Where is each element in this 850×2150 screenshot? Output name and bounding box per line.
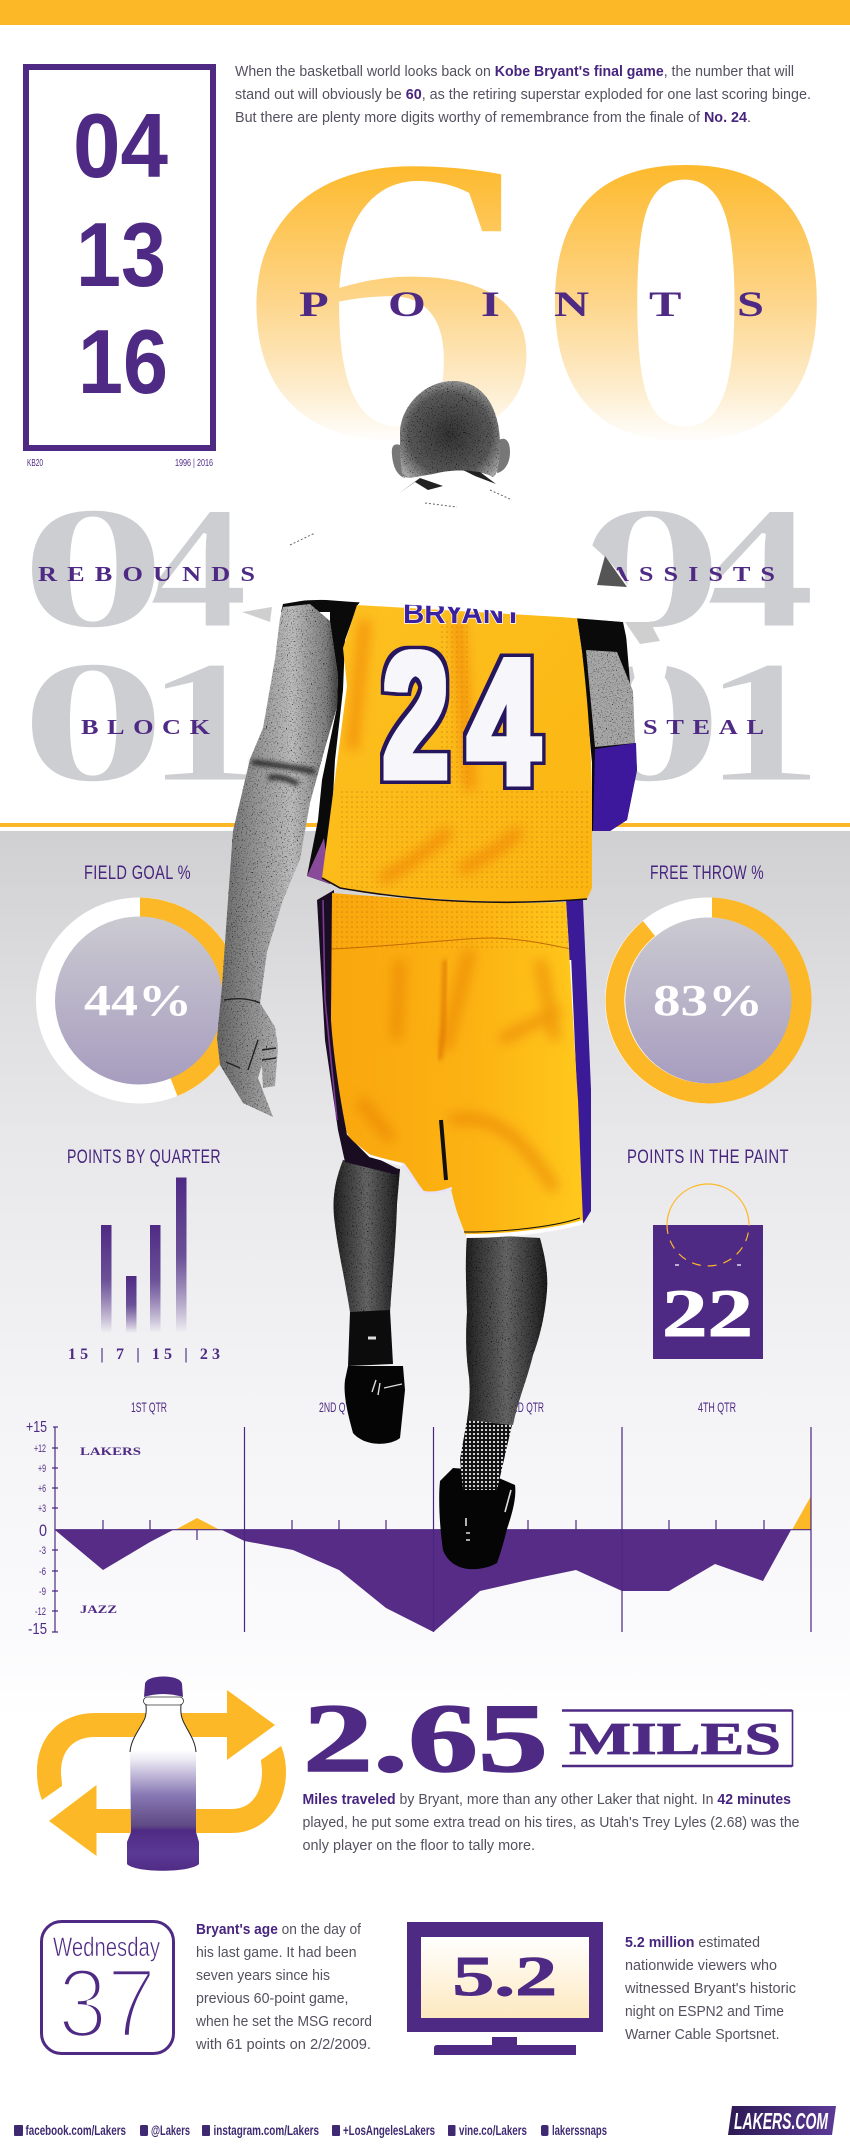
- viewers paragraph: Warner Cable Sportsnet.: [625, 2026, 780, 2043]
- age paragraph: seven years since his: [196, 1967, 330, 1984]
- team labels: LAKERS: [80, 1444, 141, 1458]
- age paragraph: [195, 1921, 372, 2053]
- jersey: [322, 597, 592, 902]
- calendar icon: age 37: [42, 1922, 174, 2058]
- left arm and hand: [217, 604, 338, 1117]
- big 60 numeral: 0: [526, 68, 846, 531]
- plus/minus chart: [26, 1399, 811, 1638]
- date numbers: 16: [78, 312, 168, 413]
- donut: free throw 83%: 83%: [653, 976, 763, 1025]
- social handles: [26, 2123, 607, 2138]
- lakers deficit area: [55, 1530, 791, 1632]
- television icon: 5.2 million: 5.2: [452, 1946, 557, 2008]
- viewers paragraph: nationwide viewers who: [625, 1957, 777, 1974]
- stat: 04 assists: ASSISTS: [610, 563, 775, 586]
- viewers paragraph: night on ESPN2 and Time: [625, 2003, 784, 2020]
- social footer: [14, 2123, 607, 2138]
- axis labels: +15: [26, 1419, 47, 1436]
- date panel captions: 1996 | 2016: [175, 457, 213, 469]
- MILES box: MILES: [569, 1713, 781, 1764]
- jersey name: BRYANT: [403, 597, 522, 630]
- points by quarter heading: POINTS BY QUARTER: [67, 1147, 221, 1168]
- date numbers: 04: [73, 96, 168, 197]
- jersey number: [383, 615, 539, 821]
- axis labels: -15: [28, 1621, 47, 1638]
- shorts side stripes: [317, 890, 591, 1224]
- POINTS label: POINTS: [299, 285, 764, 324]
- stat: 04 assists: [575, 470, 817, 666]
- social handles: instagram.com/Lakers: [214, 2123, 319, 2138]
- team labels: [80, 1444, 141, 1616]
- stat: 01 steal: 1: [701, 623, 825, 820]
- wrist and hand lines: [224, 999, 276, 1070]
- MILES box: [562, 1710, 792, 1766]
- stat: 01 block: 0: [18, 624, 168, 820]
- intro text: When the basketball world looks back on Kobe Bryant's final game, the number that will: [235, 63, 794, 80]
- social handles: facebook.com/Lakers: [26, 2123, 126, 2138]
- quarter labels: 1ST QTR: [131, 1399, 167, 1415]
- stat: 04 assists: 0: [575, 470, 725, 666]
- social handles: @Lakers: [151, 2123, 190, 2138]
- big 60 numeral: [230, 68, 846, 531]
- viewers paragraph: 5.2 million estimated: [625, 1934, 760, 1951]
- big 60 numeral: 6: [230, 68, 550, 531]
- elbow crease: [252, 762, 315, 784]
- stat: 01 block: 1: [143, 623, 267, 820]
- age paragraph: previous 60-point game,: [196, 1990, 348, 2007]
- stat: 04 rebounds: 0: [18, 470, 168, 666]
- donut: field goal 44%: [46, 898, 242, 1096]
- calendar icon: age 37: 37: [58, 1948, 156, 2058]
- axis labels: -3: [39, 1545, 46, 1557]
- jersey number: 2: [383, 615, 448, 815]
- date panel: [26, 67, 213, 469]
- head: [392, 381, 510, 478]
- intro text: [235, 63, 811, 126]
- intro text: stand out will obviously be 60, as the retiring superstar exploded for one last scoring binge.: [235, 86, 811, 103]
- stat: 04 assists: 4: [691, 470, 817, 666]
- axis labels: 0: [39, 1521, 47, 1540]
- donut: free throw 83%: [606, 898, 812, 1103]
- axis labels: -12: [35, 1606, 46, 1618]
- donut: field goal 44%: 44%: [84, 976, 192, 1025]
- date panel captions: [27, 457, 213, 469]
- miles paragraph: Miles traveled by Bryant, more than any other Laker that night. In 42 minutes: [302, 1791, 791, 1808]
- player figure: [217, 381, 667, 1569]
- stat: 01 steal: STEAL: [643, 716, 764, 739]
- miles paragraph: [302, 1791, 800, 1854]
- shorts: [330, 890, 590, 1236]
- left leg and shoe: [334, 1160, 405, 1444]
- points by quarter bars: [101, 1178, 186, 1333]
- social handles: +LosAngelesLakers: [343, 2123, 435, 2138]
- team labels: JAZZ: [80, 1602, 117, 1616]
- quarter labels: 2ND QTR: [319, 1399, 357, 1415]
- icon: water bottle: [127, 1676, 199, 1871]
- axis labels: +9: [38, 1463, 46, 1475]
- 2.65 figure: 2.65: [303, 1685, 548, 1793]
- stat: 04 rebounds: 4: [145, 469, 249, 666]
- axis and gridlines: [52, 1427, 811, 1632]
- icon: loop arrows: [37, 1690, 286, 1856]
- top yellow bar: [0, 0, 850, 25]
- field goal heading: FIELD GOAL %: [84, 863, 191, 884]
- jersey number: 4: [468, 622, 539, 821]
- free throw heading: FREE THROW %: [650, 863, 764, 884]
- stat: 01 steal: 0: [575, 624, 725, 820]
- quarter labels: [131, 1399, 736, 1415]
- stat: 01 block: [18, 623, 267, 820]
- stat: 01 block: BLOCK: [81, 716, 211, 739]
- yellow divider rule: [0, 823, 850, 827]
- age paragraph: Bryant's age on the day of: [196, 1921, 362, 1938]
- lakers lead areas: [175, 1496, 811, 1530]
- social icons: [14, 2125, 548, 2136]
- age paragraph: with 61 points on 2/2/2009.: [195, 2036, 371, 2053]
- stat: 04 rebounds: REBOUNDS: [38, 563, 255, 586]
- social handles: vine.co/Lakers: [459, 2123, 527, 2138]
- axis labels: +3: [38, 1503, 46, 1515]
- intro text: But there are plenty more digits worthy of remembrance from the finale of No. 24.: [235, 109, 751, 126]
- left arm shoulder shadow: [264, 600, 360, 612]
- date numbers: 13: [76, 205, 166, 306]
- stat: 04 rebounds: [18, 469, 255, 666]
- age paragraph: when he set the MSG record: [195, 2013, 372, 2030]
- television icon: 5.2 million: [407, 1922, 603, 2055]
- stat: 01 steal: [575, 623, 825, 820]
- points in the paint heading: POINTS IN THE PAINT: [627, 1147, 789, 1168]
- viewers paragraph: [624, 1934, 796, 2043]
- axis labels: -6: [39, 1566, 46, 1578]
- date numbers: [73, 96, 168, 413]
- quarter labels: 3RD QTR: [507, 1399, 544, 1415]
- date panel captions: KB20: [27, 457, 43, 469]
- right leg and shoe: [439, 1234, 547, 1569]
- axis labels: +6: [38, 1483, 46, 1495]
- viewers paragraph: witnessed Bryant's historic: [624, 1980, 796, 1997]
- quarter labels: 4TH QTR: [698, 1399, 736, 1415]
- axis labels: -9: [39, 1586, 46, 1598]
- miles paragraph: only player on the floor to tally more.: [302, 1837, 535, 1854]
- towel: [240, 470, 667, 697]
- social handles: lakerssnaps: [552, 2123, 607, 2138]
- left armhole shadow: [307, 604, 358, 884]
- miles paragraph: played, he put some extra tread on his tires, as Utah's Trey Lyles (2.68) was the: [302, 1814, 800, 1831]
- axis labels: +12: [34, 1443, 46, 1455]
- axis labels: [26, 1419, 47, 1638]
- miles section: arrows and bottle: [37, 1676, 286, 1871]
- calendar icon: age 37: Wednesday: [53, 1932, 160, 1962]
- paint graphic: [653, 1184, 763, 1359]
- quarter values: 15 | 7 | 15 | 23: [68, 1346, 220, 1363]
- paint graphic: 22: [662, 1275, 753, 1351]
- age paragraph: his last game. It had been: [196, 1944, 356, 1961]
- right arm and sleeve: [577, 618, 637, 831]
